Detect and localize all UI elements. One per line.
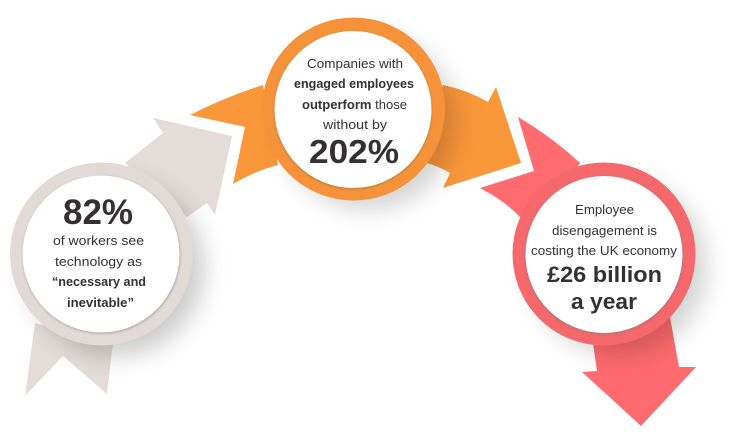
arrow: red — [480, 117, 696, 426]
text: a year: a year — [571, 289, 637, 314]
panel: 82% stat — [10, 162, 204, 356]
text: costing the UK economy: costing the UK economy — [531, 243, 678, 258]
text: disengagement is: disengagement is — [552, 223, 658, 238]
text: 82%: 82% — [63, 193, 133, 232]
text: inevitable: inevitable” — [67, 295, 134, 310]
text: without by: without by — [322, 117, 388, 132]
text: technology as: technology as — [55, 254, 143, 269]
text: outperform those: outperform those — [302, 97, 407, 112]
text: Employee: Employee — [575, 202, 634, 217]
arrow: grey — [25, 118, 232, 396]
text: engaged employees: engaged employees — [294, 76, 414, 91]
text: of workers see: of workers see — [53, 233, 144, 248]
text: necessary and: “necessary and — [52, 274, 146, 289]
text: £26 billion: £26 billion — [547, 262, 662, 287]
panel: £26 billion stat — [512, 162, 707, 355]
text: Companies with: Companies with — [307, 56, 403, 71]
text: 202%: 202% — [309, 133, 399, 170]
panel: 202% stat — [262, 18, 456, 210]
arrow: orange — [190, 85, 521, 188]
